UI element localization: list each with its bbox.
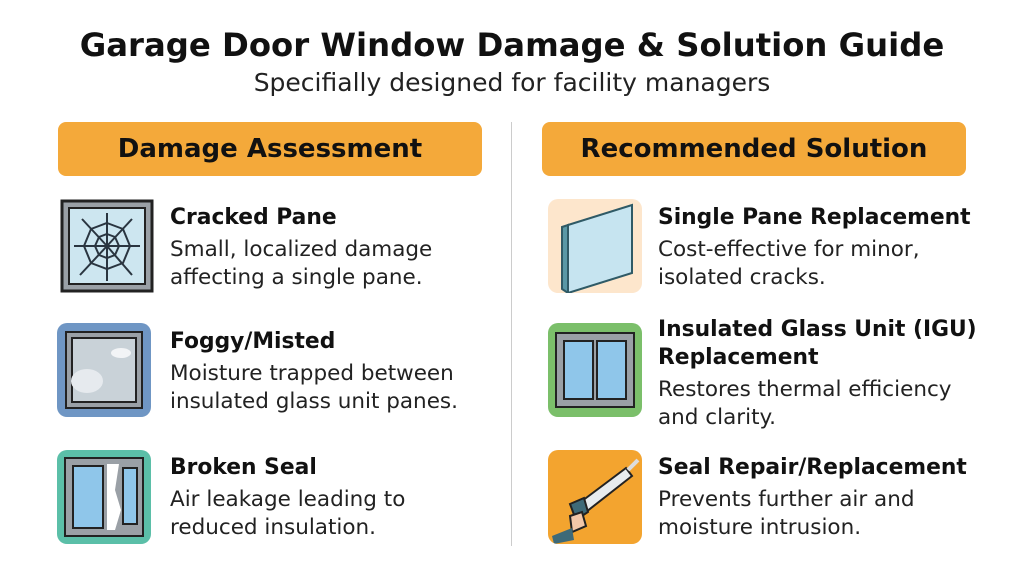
text: seal repair: Seal Repair/Replacement [658, 455, 967, 480]
title: Garage Door Window Damage & Solution Guide [80, 26, 944, 64]
text: broken seal [170, 455, 405, 540]
text: broken seal: Broken Seal [170, 455, 317, 480]
text: foggy: insulated glass unit panes. [170, 389, 458, 414]
text: cracked pane: Cracked Pane [170, 205, 337, 230]
text: IGU: and clarity. [658, 405, 776, 430]
text: IGU: Replacement [658, 345, 818, 370]
text: seal repair [658, 455, 967, 540]
subtitle: Specifially designed for facility managers [254, 68, 770, 97]
text: cracked pane: affecting a single pane. [170, 265, 423, 290]
icon: single pane [548, 199, 642, 293]
text: broken seal: Air leakage leading to [170, 487, 405, 512]
text: single pane: Cost-effective for minor, [658, 237, 920, 262]
text: foggy: Moisture trapped between [170, 361, 454, 386]
icon: cracked pane [60, 200, 154, 292]
text: IGU: Insulated Glass Unit (IGU) [658, 317, 977, 342]
text: seal repair: Prevents further air and [658, 487, 914, 512]
header: damage assessment [58, 122, 482, 176]
header: damage assessment: Damage Assessment [118, 134, 422, 164]
text: seal repair: moisture intrusion. [658, 515, 861, 540]
text: broken seal: reduced insulation. [170, 515, 376, 540]
text: single pane [658, 205, 971, 290]
text: foggy [170, 329, 458, 414]
icon: foggy [57, 323, 151, 417]
text: cracked pane: Small, localized damage [170, 237, 432, 262]
icon: caulk gun [548, 450, 642, 544]
header: recommended solution: Recommended Solution [581, 134, 927, 164]
icon: broken seal [57, 450, 151, 544]
text: single pane: Single Pane Replacement [658, 205, 971, 230]
header: recommended solution [542, 122, 966, 176]
text: IGU: Restores thermal efficiency [658, 377, 952, 402]
text: foggy: Foggy/Misted [170, 329, 335, 354]
icon: IGU [548, 323, 642, 417]
text: cracked pane [170, 205, 432, 290]
text: single pane: isolated cracks. [658, 265, 826, 290]
text: IGU [658, 317, 977, 430]
